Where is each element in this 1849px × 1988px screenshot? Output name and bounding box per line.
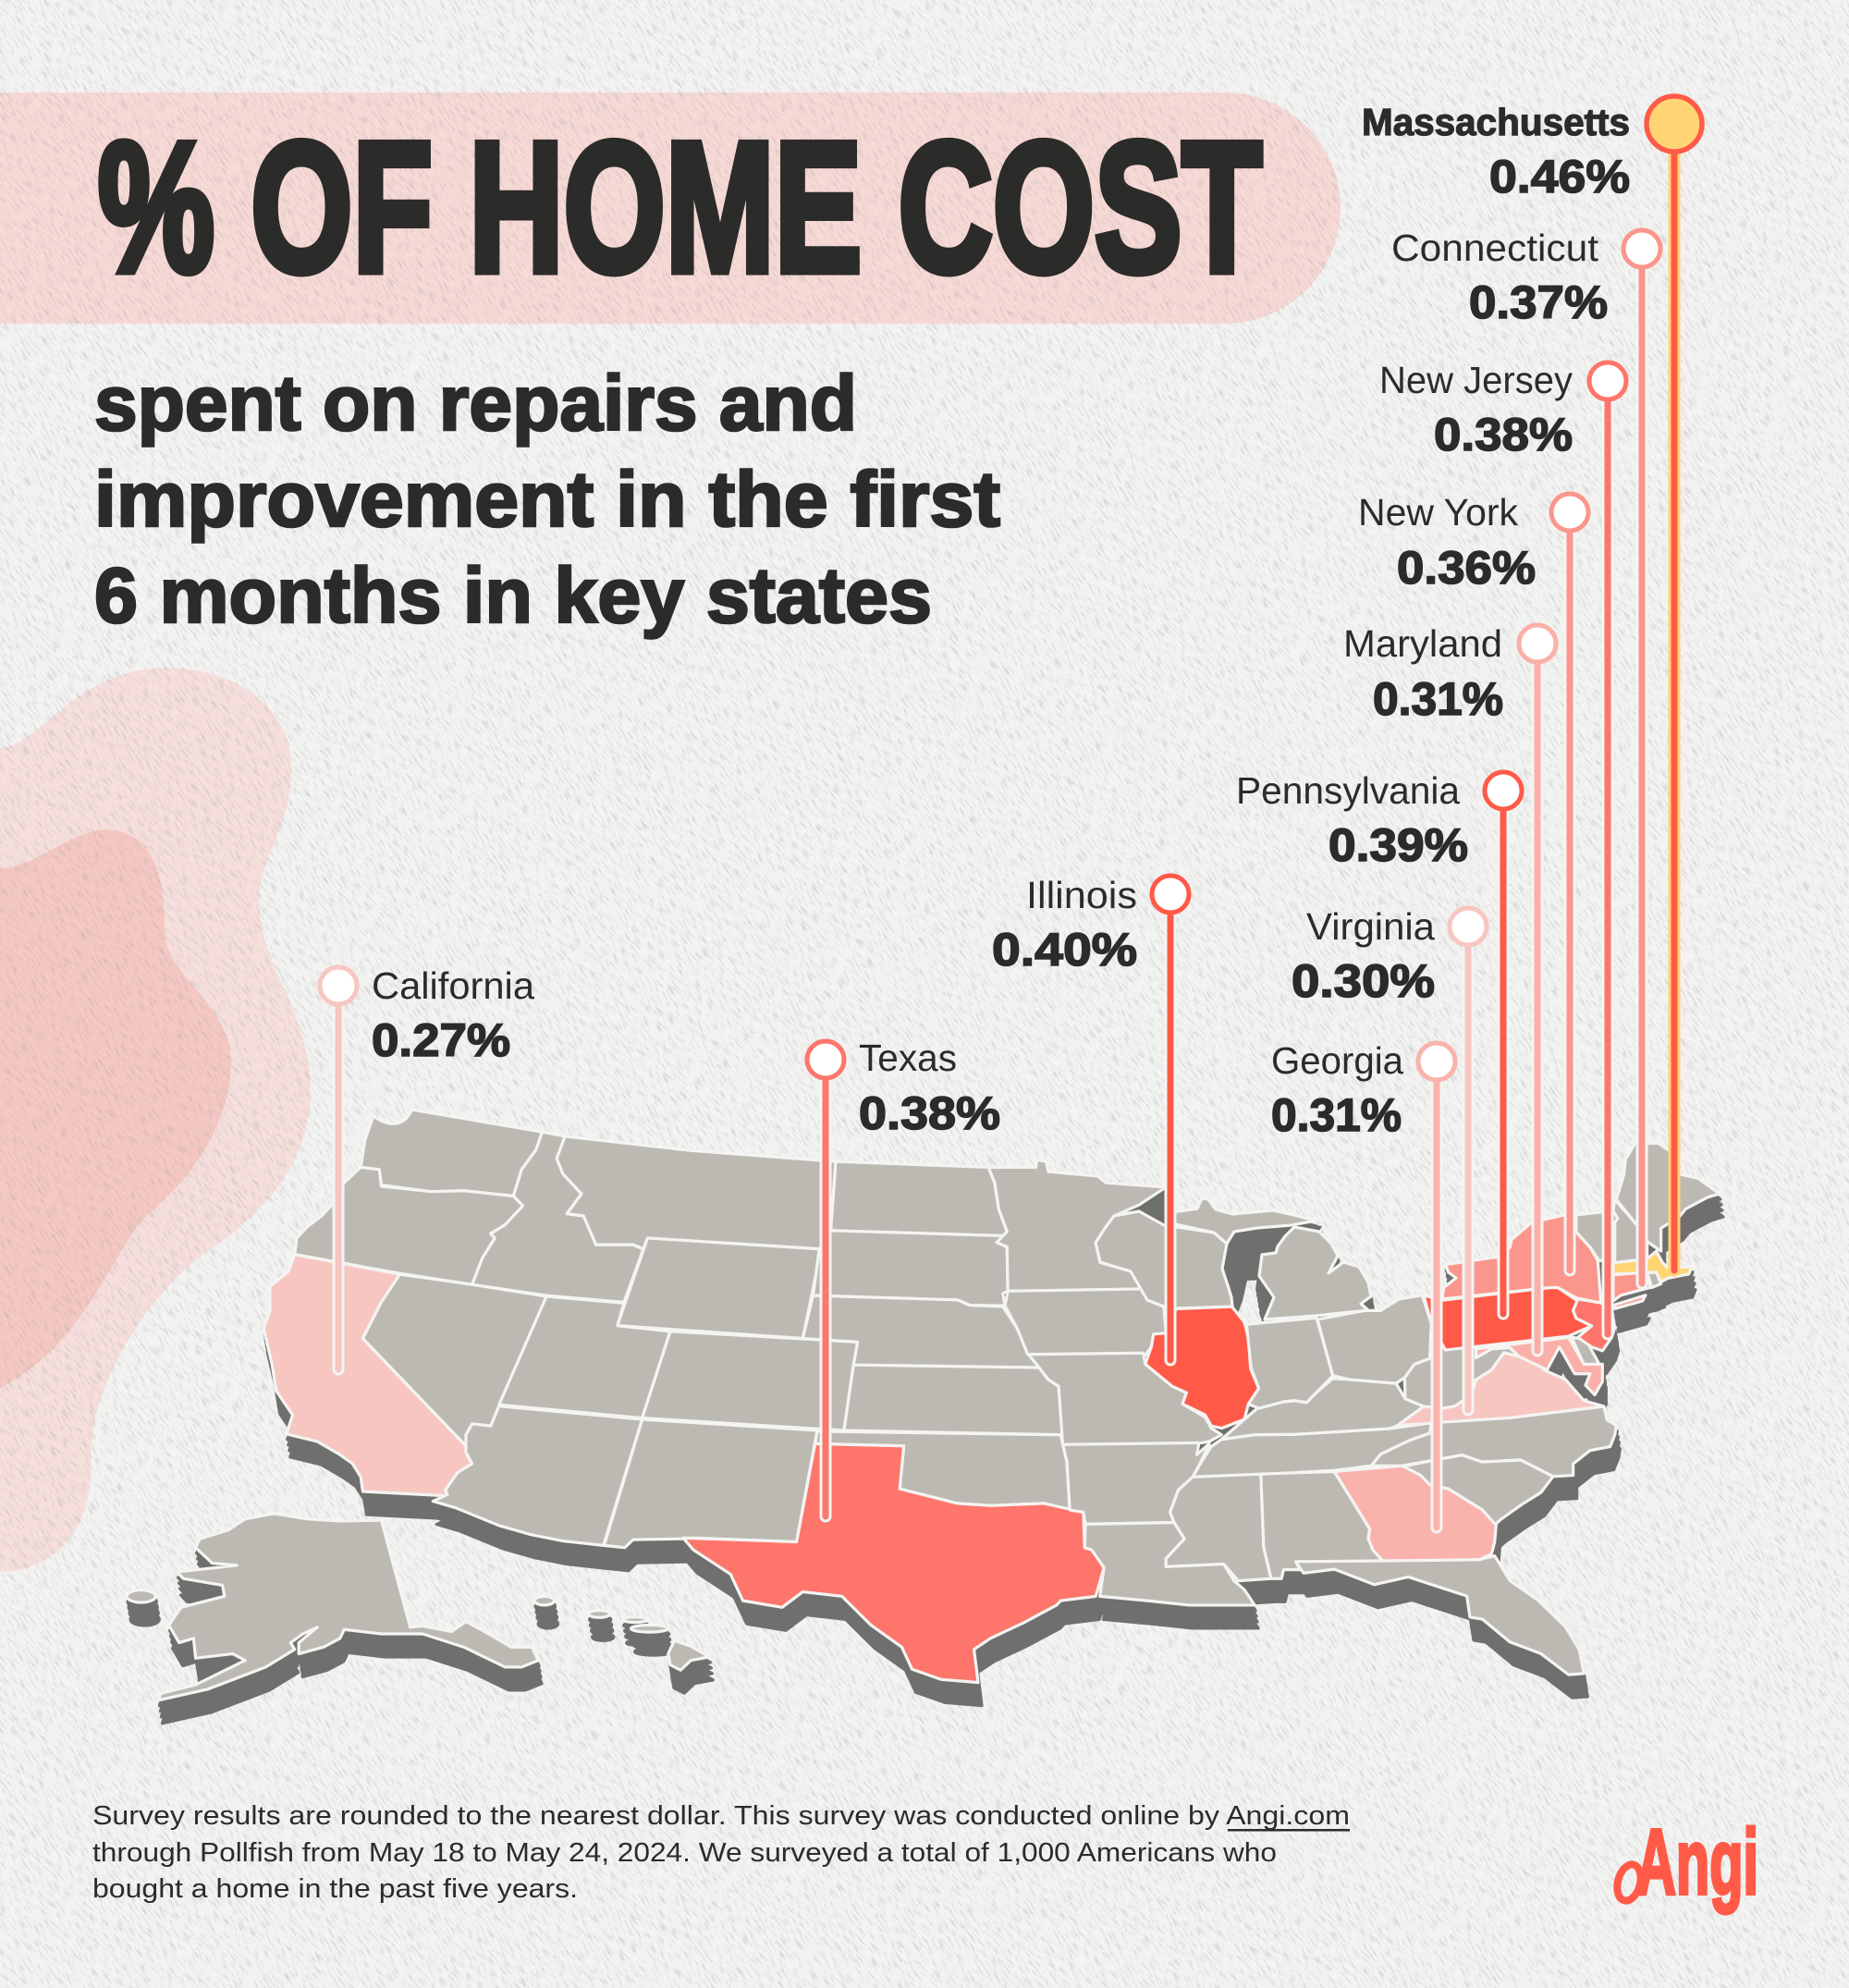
state: Minnesota (988, 1160, 1166, 1291)
state: Nevada (362, 1274, 546, 1446)
state: Arkansas (1063, 1442, 1209, 1524)
pin: Illinois (1152, 876, 1189, 1360)
title: % OF HOME COST (98, 104, 1262, 311)
state: North Dakota (831, 1161, 1007, 1236)
label: Maryland: 0.31% (1373, 673, 1503, 725)
logo: Angi: Angi (1636, 1810, 1758, 1914)
label: Pennsylvania (1236, 769, 1468, 871)
label: Texas: Texas (859, 1037, 957, 1079)
logo: Angi (1613, 1810, 1758, 1914)
label: Pennsylvania: Pennsylvania (1236, 769, 1460, 812)
state: South Carolina (1402, 1455, 1553, 1525)
label: Maryland (1343, 622, 1503, 725)
state: Missouri (1028, 1353, 1221, 1444)
state: Texas (683, 1443, 1104, 1683)
subtitle: improvement in the first (94, 456, 1000, 543)
label: Virginia (1292, 905, 1435, 1007)
label: Texas: 0.38% (859, 1087, 1000, 1139)
state: Iowa (1005, 1289, 1166, 1356)
state: New Hampshire (1613, 1199, 1647, 1263)
state: Washington (361, 1110, 543, 1196)
state: Oregon (295, 1167, 523, 1284)
state: Kentucky (1221, 1379, 1424, 1440)
pin: Georgia (1418, 1043, 1455, 1528)
state: West Virginia (1404, 1324, 1519, 1408)
state: Utah (499, 1296, 670, 1418)
state: Rhode Island (1647, 1272, 1661, 1287)
label: Georgia: 0.31% (1271, 1089, 1402, 1141)
title band (0, 92, 1341, 324)
pin: Virginia (1450, 908, 1487, 1410)
label: Massachusetts: 0.46% (1489, 151, 1630, 202)
state: Montana (557, 1136, 836, 1249)
state: California (263, 1255, 472, 1496)
label: New York: New York (1358, 491, 1518, 534)
state: Ohio (1317, 1295, 1431, 1383)
state: Delaware (1572, 1337, 1599, 1364)
state: Vermont (1576, 1211, 1618, 1260)
label: Georgia (1271, 1039, 1403, 1141)
state: South Dakota (813, 1231, 1008, 1306)
label: Illinois: Illinois (1026, 874, 1137, 916)
state: Kansas (844, 1365, 1063, 1435)
pin: New Jersey (1589, 362, 1626, 1334)
label: Massachusetts: Massachusetts (1362, 101, 1630, 143)
state: Alaska (158, 1514, 538, 1700)
label: Virginia: Virginia (1306, 905, 1435, 948)
state: Colorado (643, 1331, 858, 1430)
western states (127, 1110, 858, 1700)
label: Pennsylvania: 0.39% (1329, 819, 1468, 871)
state: New York (1442, 1215, 1601, 1303)
state: Indiana (1246, 1318, 1333, 1408)
US map (127, 1110, 1720, 1700)
footnote: Survey results are rounded to the nearest dollar. This survey was conducted online by Angi.com (92, 1801, 1350, 1831)
state: New Jersey (1573, 1299, 1615, 1351)
state: Michigan upper peninsula (1167, 1198, 1316, 1244)
subtitle: 6 months in key states (94, 552, 932, 639)
label: Connecticut (1391, 227, 1608, 328)
label: New York: 0.36% (1397, 542, 1536, 594)
label: Virginia: 0.30% (1292, 955, 1435, 1007)
pin: Connecticut (1623, 230, 1660, 1283)
Aleutian island (127, 1590, 155, 1602)
label: Maryland: Maryland (1343, 622, 1502, 665)
label: New Jersey (1379, 359, 1573, 460)
label: Illinois (992, 874, 1137, 976)
state: Michigan lower peninsula (1259, 1227, 1371, 1319)
label: Connecticut: Connecticut (1391, 227, 1599, 269)
label: Texas (859, 1037, 1000, 1139)
state: Pennsylvania (1424, 1287, 1592, 1350)
label: Connecticut: 0.37% (1469, 276, 1608, 328)
great lakes (1116, 1188, 1322, 1317)
state: Wisconsin (1096, 1211, 1232, 1308)
label: New Jersey: New Jersey (1379, 359, 1573, 401)
pin: Maryland (1519, 625, 1556, 1351)
footnote (92, 1801, 1350, 1904)
state: Alabama (1261, 1471, 1385, 1578)
Long Island (1615, 1295, 1646, 1308)
label: New Jersey: 0.38% (1434, 409, 1573, 460)
state: Illinois (1145, 1307, 1259, 1429)
pin: California (320, 967, 357, 1369)
state: Mississippi (1166, 1474, 1271, 1581)
label: California: California (372, 964, 534, 1007)
state: Tennessee (1193, 1423, 1431, 1477)
state: Maryland (1476, 1337, 1602, 1395)
subtitle: spent on repairs and (94, 360, 857, 447)
state: Florida (1296, 1556, 1584, 1675)
label: California (372, 964, 534, 1066)
eastern states (1193, 1143, 1720, 1675)
state: Connecticut (1613, 1272, 1650, 1301)
label: New York (1358, 491, 1536, 594)
decorative blob: light pink (0, 668, 311, 1572)
label: Illinois: 0.40% (992, 924, 1137, 976)
state: Idaho (472, 1132, 643, 1302)
pin: Texas (807, 1041, 844, 1516)
pin: Massachusetts (1647, 96, 1702, 1270)
state: Wyoming (618, 1238, 821, 1339)
state: Louisiana (1084, 1522, 1255, 1605)
footnote: through Pollfish from May 18 to May 24, 2024. We surveyed a total of 1,000 Americans who (92, 1838, 1277, 1868)
footnote: bought a home in the past five years. (92, 1874, 578, 1904)
state: Georgia (1334, 1466, 1496, 1562)
subtitle (94, 360, 1000, 639)
state: Nebraska (802, 1295, 1039, 1368)
state: Maine (1616, 1143, 1720, 1251)
state: Virginia (1398, 1353, 1604, 1426)
state: Arizona (433, 1406, 643, 1545)
pin: New York (1551, 494, 1588, 1270)
state: North Carolina (1371, 1406, 1616, 1477)
decorative blob: darker pink (0, 829, 231, 1388)
label: Massachusetts (1362, 101, 1630, 202)
state: Oklahoma (815, 1431, 1070, 1510)
pin: Pennsylvania (1485, 772, 1522, 1314)
state: New Mexico (605, 1419, 817, 1548)
central states (683, 1160, 1385, 1683)
Hawaiian islands (534, 1596, 709, 1670)
state: Massachusetts (1613, 1251, 1692, 1282)
label: California: 0.27% (372, 1014, 510, 1066)
label: Georgia: Georgia (1271, 1039, 1403, 1082)
